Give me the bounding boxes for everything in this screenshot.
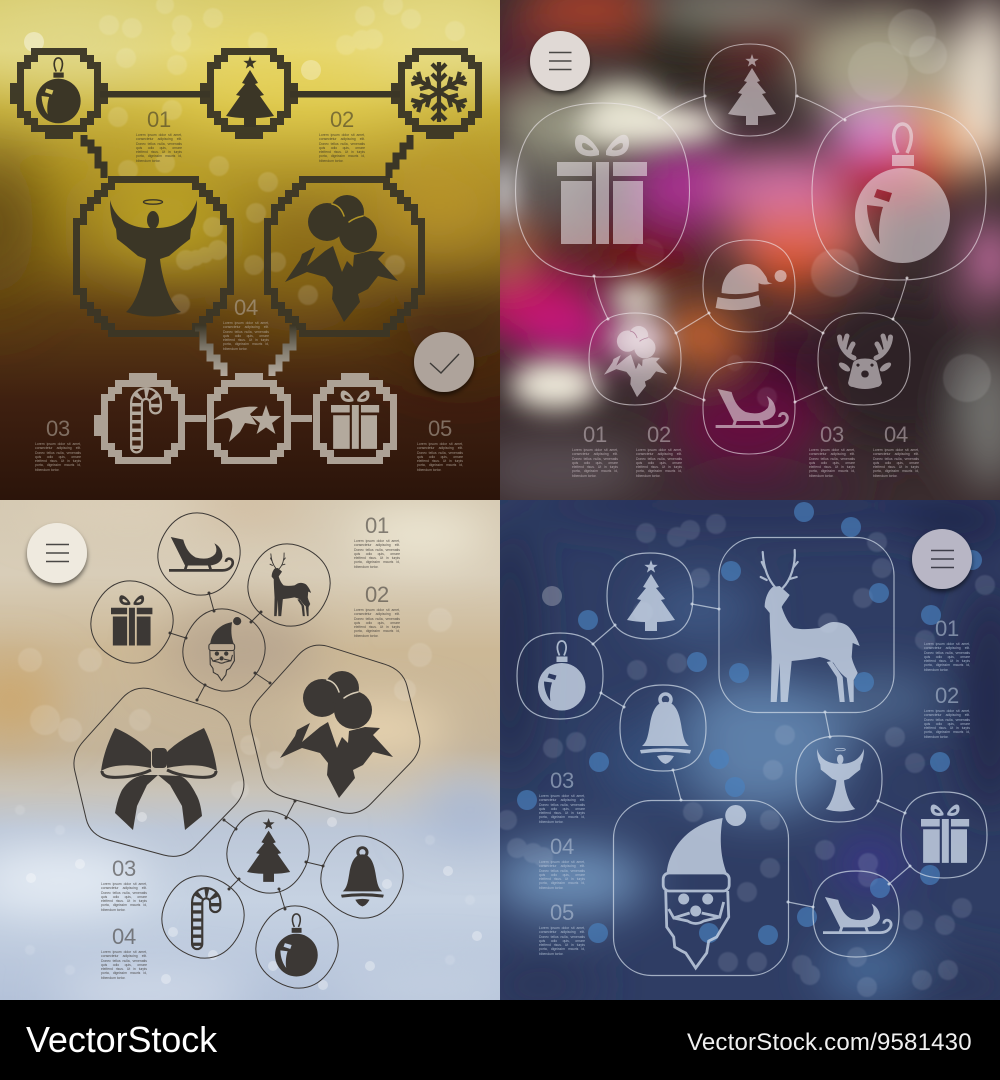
icon: hat: [716, 264, 787, 310]
text block 01: porta, dignissim mauris id,: [572, 469, 618, 473]
blob: gift: [77, 567, 187, 677]
text block 04: quis odio quis, ornare: [873, 461, 919, 465]
text block 03: Lorem ipsum dolor sit amet,: [809, 448, 855, 452]
blob: gift: [901, 792, 987, 878]
frame: deer: [719, 538, 894, 712]
text block 03: Lorem ipsum dolor sit amet,: [101, 882, 147, 886]
blob: sleigh: [813, 871, 899, 957]
text block 04: Lorem ipsum dolor sit amet,: [539, 860, 585, 864]
text block 03: Lorem ipsum dolor sit amet,: [35, 442, 81, 446]
icons group: [101, 537, 393, 976]
text block 01: quis odio quis, ornare: [572, 461, 618, 465]
text block 03: consectetur adipiscing elit.: [539, 798, 585, 802]
text block 01: porta, dignissim mauris id,: [924, 663, 970, 667]
text block 01: consectetur adipiscing elit.: [136, 137, 182, 141]
icon: tree: [247, 818, 290, 882]
text block 02: 02: [935, 683, 959, 708]
text block 01: [136, 107, 182, 163]
text block 02: [354, 582, 400, 638]
connector dots: [592, 94, 908, 404]
blob: reindeer: [818, 313, 910, 405]
icon: holly: [285, 195, 398, 322]
footer URL: VectorStock.com/9581430: [687, 1029, 972, 1056]
text block 02: quis odio quis, ornare: [924, 722, 970, 726]
panel: night blue bokeh infographic: [500, 500, 1000, 1000]
text block 02: quis odio quis, ornare: [319, 146, 365, 150]
text block 02: quis odio quis, ornare: [636, 461, 682, 465]
button: menu: [27, 523, 87, 583]
text block 04: [873, 422, 919, 478]
icon: tree: [627, 560, 675, 631]
text block 05: consectetur adipiscing elit.: [539, 930, 585, 934]
network: outlines and connectors: [74, 499, 420, 1002]
icon: gift: [111, 595, 152, 646]
text block 01: consectetur adipiscing elit.: [572, 452, 618, 456]
fading connectors: [195, 328, 296, 376]
text block 05: 05: [550, 900, 574, 925]
text block 03: [809, 422, 855, 478]
text block 05: Lorem ipsum dolor sit amet,: [417, 442, 463, 446]
icon: santa: [663, 805, 746, 968]
text block 03: [101, 856, 147, 912]
text block 02: Lorem ipsum dolor sit amet,: [636, 448, 682, 452]
icon: holly: [604, 326, 667, 397]
icon: candy cane: [197, 893, 215, 946]
text block 03: eleifend risus. Ut in turpis: [809, 465, 855, 469]
text block 05: bibendum tortor.: [417, 468, 442, 472]
text block 01: bibendum tortor.: [354, 565, 379, 569]
text block 01: consectetur adipiscing elit.: [924, 646, 970, 650]
icons group: [538, 550, 969, 968]
text block 04: Donec tellus nulla, venenatis: [539, 869, 585, 873]
footer logo: VectorStock: [26, 1019, 217, 1060]
footer bar: [0, 1000, 1000, 1080]
icon: bell: [640, 694, 691, 764]
icon: sleigh: [169, 537, 233, 570]
text block 03: porta, dignissim mauris id,: [539, 815, 585, 819]
text block 04: Donec tellus nulla, venenatis: [223, 330, 269, 334]
text block 01: Lorem ipsum dolor sit amet,: [136, 133, 182, 137]
text block 01: quis odio quis, ornare: [924, 655, 970, 659]
text block 05: porta, dignissim mauris id,: [417, 463, 463, 467]
blob: sleigh: [144, 499, 254, 609]
icon: santa: [209, 617, 241, 681]
button: menu: [530, 31, 590, 91]
blob: gift: [516, 103, 690, 277]
blob: ornament: [517, 633, 603, 719]
text block 01: bibendum tortor.: [136, 159, 161, 163]
icon ring: gift: [316, 373, 394, 460]
text block 02: Donec tellus nulla, venenatis: [319, 142, 365, 146]
text block 05: Donec tellus nulla, venenatis: [539, 935, 585, 939]
text block 01: quis odio quis, ornare: [136, 146, 182, 150]
text block 01: Donec tellus nulla, venenatis: [354, 548, 400, 552]
large ring: angel: [76, 180, 230, 334]
text block 04: Lorem ipsum dolor sit amet,: [223, 321, 269, 325]
network: outlines and connectors: [517, 538, 987, 976]
text block 05: 05: [428, 416, 452, 441]
text block 03: Donec tellus nulla, venenatis: [809, 457, 855, 461]
text block 01: Donec tellus nulla, venenatis: [136, 142, 182, 146]
text block 01: consectetur adipiscing elit.: [354, 543, 400, 547]
connectors: [594, 96, 907, 402]
pixel connectors to large circles: [84, 135, 410, 178]
text block 04: 04: [112, 924, 136, 949]
blob: angel: [796, 736, 882, 822]
text block 01: eleifend risus. Ut in turpis: [572, 465, 618, 469]
text block 02: eleifend risus. Ut in turpis: [924, 726, 970, 730]
panel: golden pixel infographic: [0, 0, 500, 500]
text block 01: 01: [365, 513, 389, 538]
text block 02: Lorem ipsum dolor sit amet,: [354, 608, 400, 612]
icon: angel: [817, 748, 864, 811]
text block 03: 03: [112, 856, 136, 881]
blob: tree: [213, 797, 323, 907]
text block 02: consectetur adipiscing elit.: [354, 612, 400, 616]
text block 05: bibendum tortor.: [539, 952, 564, 956]
icon ring: snowflake: [391, 52, 478, 139]
icon: gift: [331, 390, 379, 449]
text block 05: eleifend risus. Ut in turpis: [417, 459, 463, 463]
text block 05: [417, 416, 463, 472]
text block 04: 04: [884, 422, 908, 447]
text block 02: Donec tellus nulla, venenatis: [924, 718, 970, 722]
text block 04: bibendum tortor.: [539, 886, 564, 890]
text block 02: Lorem ipsum dolor sit amet,: [319, 133, 365, 137]
text block 01: bibendum tortor.: [924, 668, 949, 672]
text block 04: eleifend risus. Ut in turpis: [873, 465, 919, 469]
text block 05: porta, dignissim mauris id,: [539, 947, 585, 951]
panel: crimson blurred infographic: [500, 0, 1000, 500]
frame: santa: [614, 800, 788, 976]
large ring: holly: [268, 180, 422, 334]
text block 02: consectetur adipiscing elit.: [319, 137, 365, 141]
icon: deer: [270, 553, 311, 616]
panel: beige and blue hexagon infographic: [0, 500, 500, 1000]
text block 04: consectetur adipiscing elit.: [101, 954, 147, 958]
text block 02: Donec tellus nulla, venenatis: [354, 617, 400, 621]
icon: gift: [921, 804, 969, 863]
text block 02: 02: [365, 582, 389, 607]
text block 02: [636, 422, 682, 478]
text block 04: porta, dignissim mauris id,: [539, 881, 585, 885]
text block 03: consectetur adipiscing elit.: [809, 452, 855, 456]
text block 01: porta, dignissim mauris id,: [354, 560, 400, 564]
text block 04: eleifend risus. Ut in turpis: [539, 877, 585, 881]
icon: ornament: [275, 914, 318, 976]
text block 02: bibendum tortor.: [319, 159, 344, 163]
text block 02: porta, dignissim mauris id,: [319, 154, 365, 158]
icons group: [557, 54, 950, 426]
icon ring: tree: [200, 52, 298, 139]
text block 01: Lorem ipsum dolor sit amet,: [354, 539, 400, 543]
text block 02: porta, dignissim mauris id,: [354, 629, 400, 633]
blob: hat: [703, 240, 795, 332]
text block 04: porta, dignissim mauris id,: [223, 342, 269, 346]
text block 02: eleifend risus. Ut in turpis: [319, 150, 365, 154]
icon: ornament: [36, 58, 81, 123]
icon: ornament: [538, 641, 586, 710]
text block 02: bibendum tortor.: [354, 634, 379, 638]
icon: holly: [280, 671, 393, 798]
text block 03: eleifend risus. Ut in turpis: [539, 811, 585, 815]
text block 05: quis odio quis, ornare: [539, 939, 585, 943]
icon: gift: [557, 135, 647, 244]
text block 02: consectetur adipiscing elit.: [924, 713, 970, 717]
text block 01: [924, 616, 970, 672]
text block 01: Lorem ipsum dolor sit amet,: [924, 642, 970, 646]
text block 01: 01: [583, 422, 607, 447]
text block 04: eleifend risus. Ut in turpis: [101, 967, 147, 971]
text block 03: quis odio quis, ornare: [539, 807, 585, 811]
text block 02: Lorem ipsum dolor sit amet,: [924, 709, 970, 713]
text block 01: 01: [147, 107, 171, 132]
text block 04: quis odio quis, ornare: [539, 873, 585, 877]
text block 02: bibendum tortor.: [924, 735, 949, 739]
text block 01: eleifend risus. Ut in turpis: [354, 556, 400, 560]
text block 02: eleifend risus. Ut in turpis: [354, 625, 400, 629]
icon: ornament: [855, 124, 950, 263]
text block 04: 04: [550, 834, 574, 859]
blob: ornament: [242, 892, 352, 1002]
text block 04: eleifend risus. Ut in turpis: [223, 338, 269, 342]
text block 03: [539, 768, 585, 824]
text block 03: 03: [46, 416, 70, 441]
text block 01: quis odio quis, ornare: [354, 552, 400, 556]
text block 04: Lorem ipsum dolor sit amet,: [873, 448, 919, 452]
blob: bell: [620, 685, 706, 771]
text block 03: porta, dignissim mauris id,: [809, 469, 855, 473]
text block 01: Lorem ipsum dolor sit amet,: [572, 448, 618, 452]
text block 03: quis odio quis, ornare: [809, 461, 855, 465]
icon: angel: [110, 200, 197, 316]
icon: bell: [341, 848, 384, 906]
blob: bell: [307, 822, 417, 932]
blob: ornament: [812, 106, 986, 280]
bottom rings: candy, star, gift: [94, 373, 206, 460]
text block 04: [539, 834, 585, 890]
icon: reindeer head: [837, 336, 893, 389]
icon: snowflake: [410, 62, 468, 122]
blob: candy: [148, 862, 258, 972]
text block 04: porta, dignissim mauris id,: [873, 469, 919, 473]
text block 03: consectetur adipiscing elit.: [101, 886, 147, 890]
text block 03: porta, dignissim mauris id,: [101, 903, 147, 907]
connectors: [170, 593, 323, 909]
text block 04: Lorem ipsum dolor sit amet,: [101, 950, 147, 954]
text block 02: Donec tellus nulla, venenatis: [636, 457, 682, 461]
icon: sleigh: [716, 389, 787, 426]
icon: tree: [728, 54, 776, 125]
text block 01: Donec tellus nulla, venenatis: [572, 457, 618, 461]
icon: candy cane: [136, 394, 156, 449]
network: outlines and connectors: [516, 44, 986, 454]
text block 01: 01: [935, 616, 959, 641]
text block 04: porta, dignissim mauris id,: [101, 971, 147, 975]
text block 04: quis odio quis, ornare: [101, 963, 147, 967]
icon: bow: [101, 728, 217, 830]
text block 04: bibendum tortor.: [223, 347, 248, 351]
text block 02: [924, 683, 970, 739]
text block 02: 02: [647, 422, 671, 447]
text block 03: 03: [550, 768, 574, 793]
icon: tree: [226, 56, 274, 127]
text block 05: [539, 900, 585, 956]
text block 02: quis odio quis, ornare: [354, 621, 400, 625]
text block 03: bibendum tortor.: [35, 468, 60, 472]
icon ring: ornament: [10, 52, 108, 139]
text block 05: quis odio quis, ornare: [417, 455, 463, 459]
blob: santa: [169, 595, 279, 705]
icon ring: comet: [210, 373, 312, 460]
text block 03: bibendum tortor.: [101, 908, 126, 912]
text block 03: Donec tellus nulla, venenatis: [101, 891, 147, 895]
text block 03: quis odio quis, ornare: [35, 455, 81, 459]
blob: holly: [589, 313, 681, 405]
text block 04: quis odio quis, ornare: [223, 334, 269, 338]
text block 03: 03: [820, 422, 844, 447]
icon: sleigh: [823, 897, 891, 933]
text block 03: bibendum tortor.: [809, 474, 834, 478]
text block 03: [35, 416, 81, 472]
text block 05: Donec tellus nulla, venenatis: [417, 451, 463, 455]
blob: deer: [234, 530, 344, 640]
text block 04: [223, 295, 269, 351]
text block 01: porta, dignissim mauris id,: [136, 154, 182, 158]
button: check: [414, 332, 474, 392]
blob: sleigh: [703, 362, 795, 454]
blob: tree: [607, 553, 693, 639]
text block 02: porta, dignissim mauris id,: [924, 730, 970, 734]
connector dots: [168, 592, 324, 910]
text block 03: bibendum tortor.: [539, 820, 564, 824]
text block 01: [572, 422, 618, 478]
text block 01: [354, 513, 400, 569]
text block 05: consectetur adipiscing elit.: [417, 446, 463, 450]
text block 02: porta, dignissim mauris id,: [636, 469, 682, 473]
text block 01: eleifend risus. Ut in turpis: [136, 150, 182, 154]
hexagon: holly: [250, 645, 420, 813]
text block 03: consectetur adipiscing elit.: [35, 446, 81, 450]
text block 04: Donec tellus nulla, venenatis: [873, 457, 919, 461]
blob: tree: [704, 44, 796, 136]
text block 04: 04: [234, 295, 258, 320]
text block 02: bibendum tortor.: [636, 474, 661, 478]
text block 04: consectetur adipiscing elit.: [873, 452, 919, 456]
top row connectors: [100, 91, 400, 98]
text block 02: consectetur adipiscing elit.: [636, 452, 682, 456]
text block 02: [319, 107, 365, 163]
connectors: [593, 604, 910, 907]
text block 01: eleifend risus. Ut in turpis: [924, 659, 970, 663]
text block 05: eleifend risus. Ut in turpis: [539, 943, 585, 947]
text block 03: quis odio quis, ornare: [101, 895, 147, 899]
icon: deer: [761, 550, 860, 702]
text block 02: eleifend risus. Ut in turpis: [636, 465, 682, 469]
text block 05: Lorem ipsum dolor sit amet,: [539, 926, 585, 930]
text block 04: bibendum tortor.: [101, 976, 126, 980]
hexagon: bow: [74, 688, 244, 856]
text block 02: 02: [330, 107, 354, 132]
text block 01: bibendum tortor.: [572, 474, 597, 478]
text block 03: eleifend risus. Ut in turpis: [101, 899, 147, 903]
text block 03: Donec tellus nulla, venenatis: [539, 803, 585, 807]
text block 03: Lorem ipsum dolor sit amet,: [539, 794, 585, 798]
text block 04: [101, 924, 147, 980]
text block 01: Donec tellus nulla, venenatis: [924, 651, 970, 655]
text block 03: Donec tellus nulla, venenatis: [35, 451, 81, 455]
connector dots: [592, 602, 912, 908]
text block 04: consectetur adipiscing elit.: [223, 325, 269, 329]
icon: shooting star: [213, 405, 281, 442]
text block 04: Donec tellus nulla, venenatis: [101, 959, 147, 963]
button: menu: [912, 529, 972, 589]
text block 04: bibendum tortor.: [873, 474, 898, 478]
text block 03: eleifend risus. Ut in turpis: [35, 459, 81, 463]
text block 03: porta, dignissim mauris id,: [35, 463, 81, 467]
text block 04: consectetur adipiscing elit.: [539, 864, 585, 868]
